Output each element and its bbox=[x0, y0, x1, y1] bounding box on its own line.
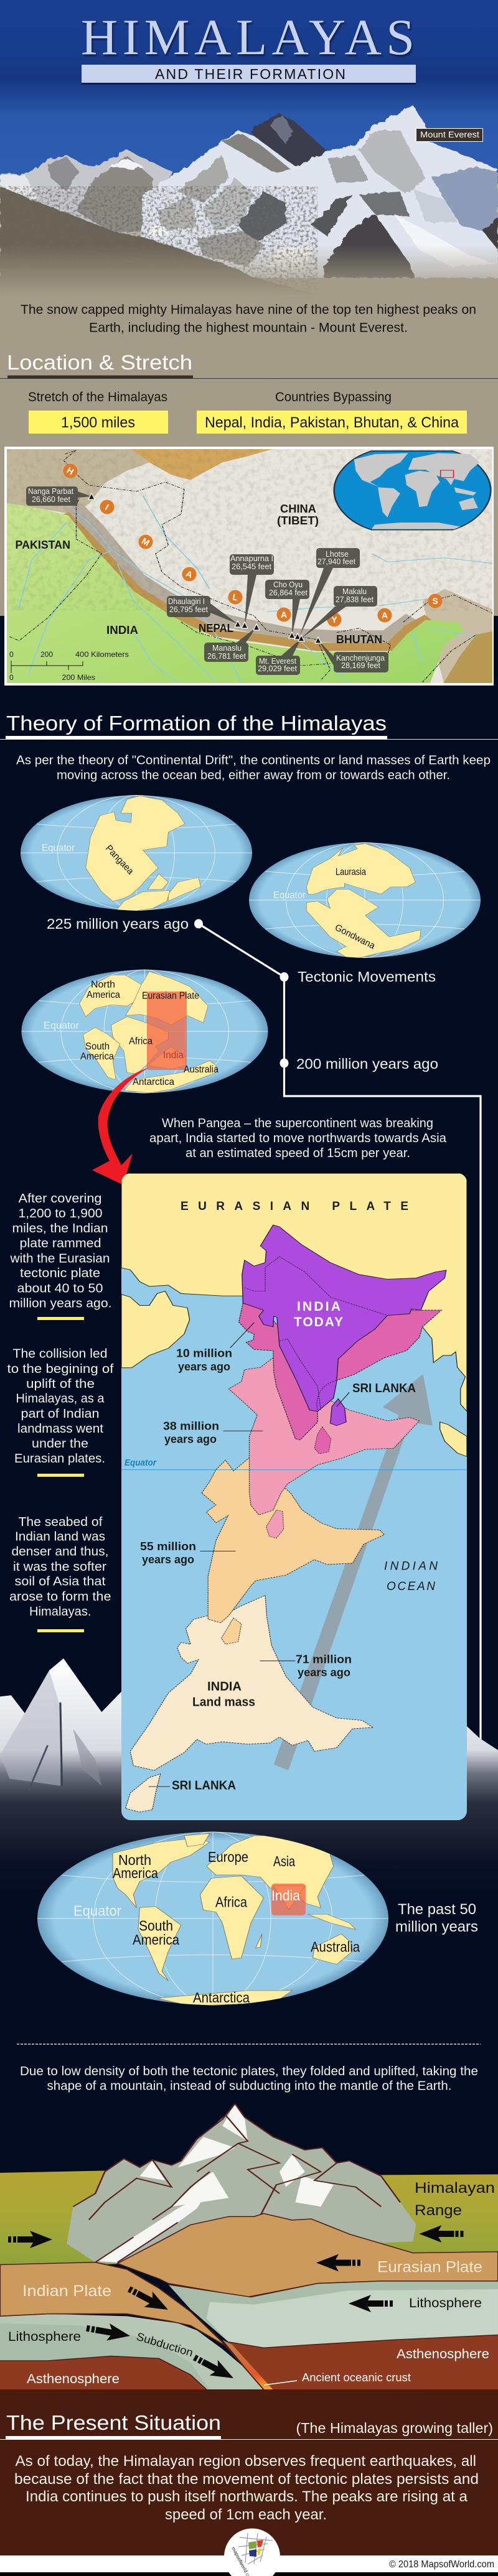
panel labels: OCEAN bbox=[387, 1580, 435, 1593]
cross-section labels: Asthenosphere bbox=[397, 2347, 489, 2361]
globe: 200 million years ago: Eurasian Plate bbox=[142, 990, 199, 1002]
lithosphere right bbox=[168, 2281, 498, 2348]
panel labels: INDIAN bbox=[384, 1560, 438, 1573]
side text: seabed bbox=[9, 1515, 111, 1632]
arrow: northward movement bbox=[274, 1374, 433, 1770]
side text: collision: plate rammed bbox=[20, 1237, 101, 1250]
peak callouts: Nanga Parbat bbox=[28, 486, 73, 496]
panel labels: years ago bbox=[142, 1553, 194, 1566]
globe: 200 million years ago bbox=[21, 970, 268, 1093]
text: folding and uplift bbox=[20, 2065, 478, 2093]
peak callouts: Kanchenjunga bbox=[336, 653, 385, 663]
text: Pangea breaking apart: apart, India started to move northwards towards Asia bbox=[149, 1132, 447, 1145]
label: Mount Everest bbox=[416, 128, 483, 142]
side text: uplift: Himalayas, as a bbox=[16, 1392, 105, 1406]
panel labels: years ago bbox=[298, 1666, 350, 1678]
globe: 200 million years ago: Africa bbox=[129, 1036, 153, 1046]
title: HIMALAYAS: HIMALAYAS bbox=[81, 9, 415, 65]
peak callouts: Cho Oyu bbox=[273, 580, 303, 589]
side text: uplift: to the begining of bbox=[7, 1362, 114, 1376]
ancient oceanic crust bbox=[222, 2340, 273, 2389]
landmass: India today bbox=[242, 1225, 446, 1411]
panel labels: years ago bbox=[178, 1360, 230, 1373]
India outlines, dashed bbox=[245, 1257, 387, 1410]
panel labels: Equator bbox=[125, 1458, 157, 1468]
landmass: 38 million years ago bbox=[228, 1358, 419, 1515]
globe: 200 million years ago: India bbox=[163, 1050, 184, 1061]
globe: present day world bbox=[37, 1832, 388, 2006]
peak callouts: 26,660 feet bbox=[32, 495, 70, 504]
globe: Laurasia and Gondwana: Gondwana bbox=[333, 922, 377, 952]
globe: 200 million years ago: Antarctica bbox=[133, 1077, 174, 1087]
globe: Pangaea: Pangaea bbox=[103, 843, 136, 877]
panel: India's northward drift map bbox=[121, 1173, 467, 1820]
asthenosphere left bbox=[0, 2356, 207, 2389]
globe: present day world: North bbox=[118, 1852, 151, 1868]
map scale: 200 bbox=[40, 650, 53, 659]
intro: continental drift: As per the theory of "Continental Drift", the continents or land masses of Earth keep bbox=[16, 754, 491, 768]
peak callouts bbox=[26, 486, 388, 675]
map scale bbox=[9, 652, 128, 680]
timeline labels bbox=[47, 916, 438, 1072]
country labels: BHUTAN bbox=[336, 633, 382, 646]
heading: Theory of Formation bbox=[0, 712, 498, 740]
plate movement arrows bbox=[8, 2225, 463, 2386]
text: present situation: As of today, the Himalayan region observes frequent earthquakes, all bbox=[15, 2453, 476, 2470]
peak callouts: Mt. Everest bbox=[259, 656, 296, 666]
background mountains bbox=[0, 1658, 498, 1898]
panel labels: 38 million bbox=[163, 1420, 219, 1432]
footer band bbox=[0, 2555, 498, 2572]
cross-section labels: Subduction bbox=[135, 2330, 195, 2359]
country labels: PAKISTAN bbox=[15, 539, 70, 551]
side text: collision: After covering bbox=[19, 1192, 102, 1206]
text: Pangea breaking apart: When Pangea – the supercontinent was breaking bbox=[162, 1117, 433, 1130]
peak callouts: 29,029 feet bbox=[258, 664, 297, 673]
globe: Pangaea bbox=[21, 795, 252, 912]
peak callouts: Makalu bbox=[342, 587, 367, 596]
HIMALAYAS letter markers: Y bbox=[331, 615, 337, 625]
peak callouts: 26,795 feet bbox=[169, 605, 208, 614]
globe: 200 million years ago: America bbox=[87, 990, 120, 1000]
panel labels: SRI LANKA bbox=[172, 1779, 236, 1793]
sky bbox=[0, 0, 498, 187]
map of the Himalayas bbox=[0, 446, 498, 686]
HIMALAYAS letter markers: S bbox=[432, 596, 438, 606]
text: Pangea breaking apart: at an estimated speed of 15cm per year. bbox=[186, 1146, 410, 1160]
side text: uplift: uplift of the bbox=[26, 1377, 95, 1391]
side text: uplift: The collision led bbox=[12, 1347, 107, 1361]
country labels bbox=[15, 503, 382, 646]
peak callouts: Annapurna I bbox=[230, 554, 273, 563]
side text: seabed: Indian land was bbox=[15, 1530, 105, 1544]
side text: seabed: arose to form the bbox=[9, 1590, 111, 1604]
timeline label: the past 50 million years: The past 50 bbox=[398, 1901, 476, 1918]
globe: present day world: India bbox=[271, 1887, 300, 1904]
HIMALAYAS letter markers: A bbox=[185, 569, 194, 580]
peak callouts: 27,838 feet bbox=[336, 595, 374, 604]
panel labels: TODAY bbox=[294, 1315, 343, 1329]
bottom edge bbox=[0, 2572, 498, 2576]
cross-section labels: Himalayan bbox=[415, 2180, 495, 2197]
inset world globe bbox=[334, 451, 491, 530]
side text: seabed: it was the softer bbox=[13, 1560, 106, 1574]
stat: countries bypassing: Nepal, India, Pakistan, Bhutan, & China bbox=[205, 414, 459, 431]
side text: collision: miles, the Indian bbox=[12, 1222, 108, 1235]
globe: Laurasia and Gondwana: Laurasia bbox=[336, 867, 366, 877]
dashed divider bbox=[17, 2044, 481, 2045]
cross-section labels: Eurasian Plate bbox=[377, 2258, 482, 2276]
cross-section labels: Ancient oceanic crust bbox=[302, 2371, 411, 2384]
globe: present day world: Asia bbox=[273, 1853, 295, 1869]
red curved arrow bbox=[92, 1067, 149, 1185]
globe: present day world: America bbox=[113, 1865, 158, 1881]
panel labels: INDIA bbox=[207, 1680, 242, 1693]
heading: The Present Situation: The Present Situation bbox=[6, 2411, 221, 2434]
HIMALAYAS letter markers: A bbox=[281, 610, 287, 620]
stat: stretch of the Himalayas: 1,500 miles bbox=[61, 414, 135, 431]
heading: The Present Situation bbox=[0, 2411, 498, 2440]
stat: countries bypassing bbox=[197, 390, 467, 434]
side text: uplift bbox=[7, 1347, 114, 1477]
side text: uplift: landmass went bbox=[17, 1422, 103, 1436]
land: Eurasian plate bbox=[121, 1173, 467, 1411]
cross-section labels: Lithosphere bbox=[409, 2296, 482, 2310]
heading: Location & Stretch bbox=[0, 351, 498, 379]
country labels: CHINA bbox=[280, 503, 316, 515]
panel labels: 10 million bbox=[176, 1347, 232, 1360]
stat: countries bypassing: Countries Bypassing bbox=[275, 390, 392, 404]
landmass: 10 million years ago bbox=[239, 1303, 441, 1440]
side text: uplift: under the bbox=[32, 1437, 88, 1451]
text: folding and uplift: shape of a mountain, instead of subducting into the mantle of the Earth. bbox=[47, 2079, 452, 2093]
globe: Laurasia and Gondwana: Equator bbox=[273, 890, 306, 901]
side text: seabed: denser and thus, bbox=[11, 1545, 108, 1559]
panel labels: SRI LANKA bbox=[352, 1382, 416, 1395]
globe: 200 million years ago: North bbox=[91, 979, 115, 990]
globe: present day world: Africa bbox=[215, 1894, 247, 1910]
peak callouts: Manaslu bbox=[212, 643, 242, 653]
HIMALAYAS letter markers: I bbox=[103, 502, 111, 512]
side text: collision: million years ago. bbox=[9, 1296, 112, 1310]
HIMALAYAS letter markers: A bbox=[382, 610, 388, 620]
peak callouts: 26,545 feet bbox=[232, 562, 271, 571]
cross-section labels: Indian Plate bbox=[22, 2282, 111, 2300]
text: present situation: because of the fact that the movement of tectonic plates persists and bbox=[14, 2471, 479, 2488]
heading: The Present Situation: (The Himalayas growing taller) bbox=[296, 2420, 493, 2436]
mountain range bbox=[67, 2104, 416, 2263]
globe: present day world: Europe bbox=[208, 1849, 248, 1865]
peak callouts: Lhotse bbox=[326, 549, 349, 559]
side text: collision: 1,200 to 1,900 bbox=[19, 1207, 102, 1221]
peak callouts: 28,169 feet bbox=[341, 661, 380, 670]
side text: uplift: part of Indian bbox=[21, 1407, 100, 1421]
lithosphere left bbox=[0, 2314, 263, 2389]
heading: Location & Stretch: Location & Stretch bbox=[7, 351, 192, 374]
globe: present day world: America bbox=[133, 1932, 179, 1948]
side text: uplift: Eurasian plates. bbox=[14, 1452, 105, 1466]
Eurasian plate bbox=[118, 2213, 498, 2297]
timeline labels: 225 million years ago bbox=[47, 916, 189, 932]
peak callouts: Dhaulagiri I bbox=[168, 597, 205, 606]
panel labels: 71 million bbox=[296, 1653, 352, 1666]
panel labels bbox=[125, 1200, 438, 1793]
label: Mount Everest: Mount Everest bbox=[420, 129, 479, 139]
panel labels: Land mass bbox=[192, 1696, 255, 1709]
peak callouts: 26,864 feet bbox=[269, 588, 308, 597]
side text: collision: tectonic plate bbox=[20, 1267, 100, 1280]
Indian plate bbox=[0, 2262, 245, 2368]
maroon lower background bbox=[0, 2389, 498, 2555]
equator line bbox=[121, 1469, 467, 1471]
landmass: 55 million years ago bbox=[202, 1458, 384, 1623]
globe: 200 million years ago: America bbox=[80, 1051, 114, 1062]
side text: collision: about 40 to 50 bbox=[17, 1281, 103, 1295]
text: folding and uplift: Due to low density of both the tectonic plates, they folded and uplifted, taking the bbox=[20, 2065, 478, 2078]
stat: stretch of the Himalayas: Stretch of the Himalayas bbox=[28, 390, 167, 404]
side text: seabed: Himalayas. bbox=[29, 1605, 91, 1619]
text: present situation: India continues to push itself northwards. The peaks are rising at a bbox=[26, 2488, 468, 2505]
logo: MapsofWorld bbox=[224, 2528, 280, 2576]
text: present situation bbox=[14, 2453, 479, 2523]
subtitle banner bbox=[82, 65, 416, 85]
peak markers bbox=[88, 493, 321, 643]
heading: Theory of Formation: Theory of Formation of the Himalayas bbox=[6, 712, 387, 735]
tan background band bbox=[0, 274, 498, 616]
intro text: Earth, including the highest mountain - Mount Everest. bbox=[89, 321, 408, 335]
country labels: (TIBET) bbox=[277, 514, 319, 527]
landmass: 71 million years ago bbox=[130, 1596, 373, 1770]
HIMALAYAS letter markers: L bbox=[232, 592, 239, 603]
HIMALAYAS letter markers bbox=[63, 464, 442, 627]
leader lines bbox=[149, 1323, 349, 1787]
cross-section labels bbox=[8, 2180, 495, 2386]
cross-section of the Himalayas bbox=[0, 2104, 498, 2389]
timeline labels: Tectonic Movements bbox=[298, 969, 436, 985]
peak callouts: 27,940 feet bbox=[317, 557, 355, 566]
timeline connector bbox=[194, 919, 481, 1894]
globe: present day world: Antarctica bbox=[193, 1989, 250, 2006]
globe: present day world: Australia bbox=[311, 1938, 360, 1955]
side text: collision bbox=[9, 1192, 112, 1320]
globe: 200 million years ago: Equator bbox=[44, 1020, 80, 1031]
side text: seabed: soil of Asia that bbox=[15, 1575, 106, 1589]
timeline label: the past 50 million years: million years bbox=[395, 1918, 478, 1935]
globe: present day world: South bbox=[139, 1917, 173, 1933]
text: present situation: speed of 1cm each year. bbox=[165, 2506, 327, 2523]
cross-section labels: Lithosphere bbox=[8, 2330, 81, 2344]
intro text: The snow capped mighty Himalayas have nine of the top ten highest peaks on bbox=[21, 302, 476, 317]
HIMALAYAS letter markers: M bbox=[140, 536, 151, 548]
text: Pangea breaking apart bbox=[149, 1117, 447, 1160]
side text: collision: with the Eurasian bbox=[9, 1252, 110, 1265]
panel labels: EURASIAN PLATE bbox=[181, 1200, 408, 1213]
intro text bbox=[21, 302, 476, 335]
cross-section labels: Range bbox=[415, 2202, 462, 2219]
side text: seabed: The seabed of bbox=[19, 1515, 103, 1529]
tan blend under photo bbox=[0, 296, 498, 315]
country labels: INDIA bbox=[106, 624, 138, 636]
HIMALAYAS letter markers: H bbox=[65, 465, 75, 477]
map scale: 0 bbox=[9, 673, 14, 682]
intro: continental drift: moving across the ocean bed, either away from or towards each other. bbox=[57, 769, 450, 783]
stat: stretch of the Himalayas bbox=[28, 390, 168, 434]
map scale: 0 bbox=[9, 650, 14, 659]
globe: 200 million years ago: Australia bbox=[184, 1064, 218, 1075]
header photo: snow capped Himalayas bbox=[0, 0, 498, 305]
cross-section labels: Asthenosphere bbox=[27, 2372, 120, 2386]
timeline label: the past 50 million years bbox=[395, 1901, 478, 1935]
subtitle banner: AND THEIR FORMATION bbox=[155, 66, 345, 82]
panel labels: INDIA bbox=[297, 1300, 341, 1314]
olive ground bbox=[0, 2170, 498, 2265]
globe: Pangaea: Equator bbox=[42, 843, 75, 853]
map scale: 400 Kilometers bbox=[75, 650, 129, 659]
globe: 200 million years ago: South bbox=[85, 1041, 110, 1052]
timeline labels: 200 million years ago bbox=[296, 1056, 438, 1072]
asthenosphere right bbox=[228, 2335, 498, 2389]
intro: continental drift bbox=[16, 754, 491, 783]
panel labels: 55 million bbox=[140, 1540, 196, 1553]
panel labels: years ago bbox=[164, 1433, 217, 1446]
peak callouts: 26,781 feet bbox=[207, 651, 246, 661]
globe: present day world: Equator bbox=[73, 1902, 121, 1918]
globe: Laurasia and Gondwana bbox=[249, 842, 481, 958]
country labels: NEPAL bbox=[199, 622, 233, 635]
map scale: 200 Miles bbox=[62, 673, 95, 682]
